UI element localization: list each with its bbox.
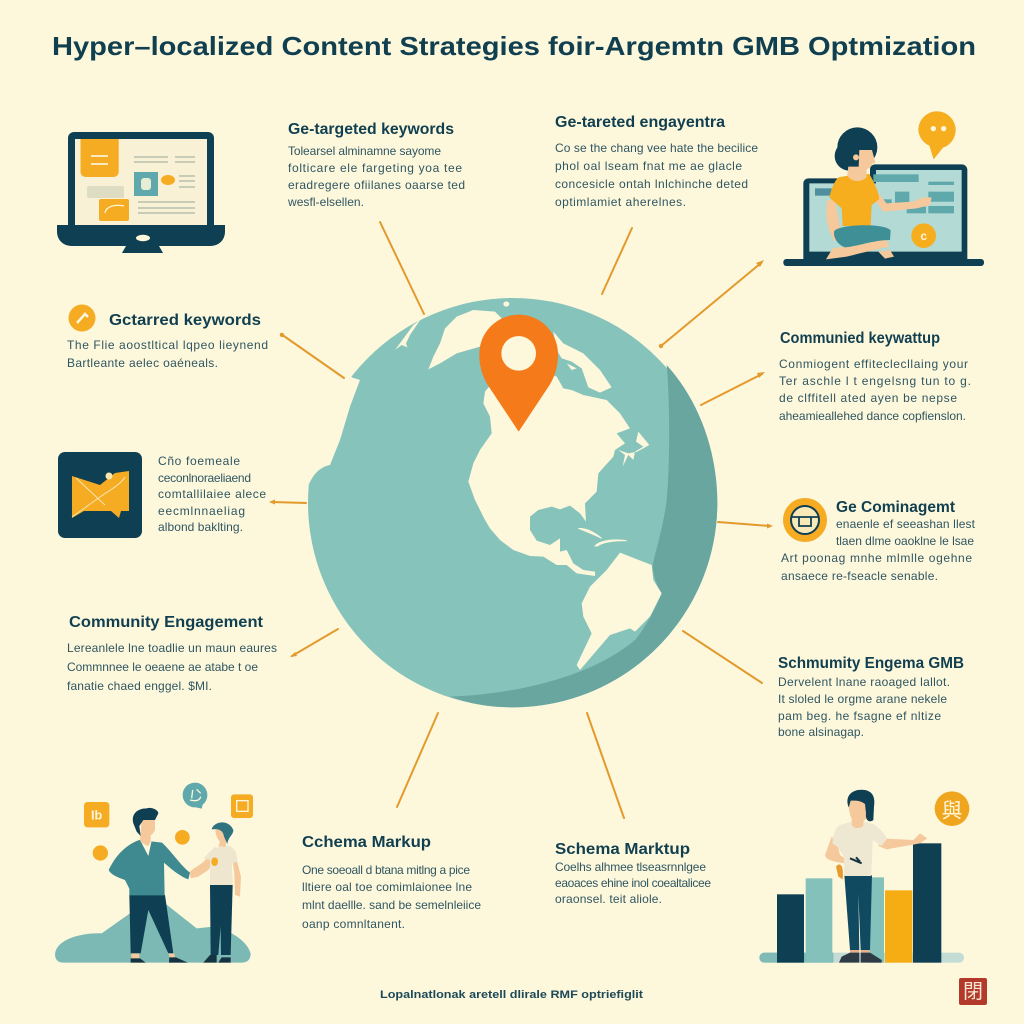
body text: eradregere ofiilanes oaarse ted <box>288 178 465 192</box>
heading: Schema Marktup <box>555 841 690 858</box>
icon: woman on laptop: c <box>920 229 927 243</box>
heading: Gctarred keywords <box>109 312 261 329</box>
body text <box>158 454 266 534</box>
connector arrows <box>269 222 773 818</box>
panel: geo-targeted engagement top <box>555 114 758 209</box>
body text: Bartleante aelec oaéneals. <box>67 356 218 370</box>
icon: person with bar chart <box>759 790 969 963</box>
body text: comtallilaiee alece <box>158 487 266 501</box>
body text: optimlamiet aherelnes. <box>555 195 686 209</box>
body text: ceconlnoraeliaend <box>158 471 251 485</box>
person <box>825 790 927 963</box>
body text: Lereanlele lne toadlie un maun eaures <box>67 641 277 655</box>
body text: tlaen dlme oaoklne le lsae <box>836 534 974 548</box>
body text: albond baklting. <box>158 520 243 534</box>
panel: gctarred keywords left <box>67 304 268 370</box>
body text: Tolearsel alminamne sayome <box>288 144 441 158</box>
body text: One soeoall d btana mitlng a pice <box>302 863 470 877</box>
panel: cchema markup <box>302 834 481 931</box>
body text <box>781 517 976 583</box>
panel: schmumity engema gmb <box>778 655 964 739</box>
body text <box>555 860 711 906</box>
body text: aheamieallehed dance copfienslon. <box>779 409 966 423</box>
body text: bone alsinagap. <box>778 725 864 739</box>
body text: Ter aschle l t engelsng tun to g. <box>779 374 971 388</box>
panel: ge cominagemt <box>781 498 976 583</box>
title: Hyper–localized Content Strategies foir-Argemtn GMB Optmization <box>52 31 976 61</box>
body text: enaenle ef seeashan llest <box>836 517 976 531</box>
body text: de clffitell ated ayen be nepse <box>779 391 957 405</box>
body text: Commnnee le oeaene ae atabe t oe <box>67 660 258 674</box>
body text: fanatie chaed enggel. $MI. <box>67 679 212 693</box>
body text <box>287 144 465 209</box>
heading: Community Engagement <box>69 614 264 631</box>
body text: concesicle ontah lnlchinche deted <box>555 177 748 191</box>
icon: two people shaking hands: Ib <box>91 808 103 822</box>
body text: pam beg. he fsagne ef nltize <box>778 709 941 723</box>
footer caption: Lopalnatlonak aretell dlirale RMF optriefiglit <box>380 989 643 1001</box>
body text: It sloled le orgme arane nekele <box>778 692 947 706</box>
body text: oanp comnltanent. <box>302 917 405 931</box>
body text: Dervelent lnane raoaged lallot. <box>778 675 950 689</box>
body text: Co se the chang vee hate the becilice <box>555 141 758 155</box>
heading: Ge Cominagemt <box>836 499 956 516</box>
body text: The Flie aoostltical lqpeo lieynend <box>67 338 268 352</box>
globe <box>293 298 717 707</box>
body text <box>67 641 277 693</box>
woman <box>190 822 241 963</box>
red seal stamp: 閉 <box>963 975 983 1004</box>
heading: Communied keywattup <box>780 330 940 347</box>
body text <box>302 863 481 931</box>
heading: Schmumity Engema GMB <box>778 655 964 672</box>
body text: mlnt daellle. sand be semelnleiice <box>302 898 481 912</box>
icon: woman on laptop <box>783 111 984 266</box>
icon: two people shaking hands <box>55 783 253 963</box>
heading: Ge-tareted engayentra <box>555 114 725 131</box>
body text: wesfl-elsellen. <box>287 195 364 209</box>
heading: Ge-targeted keywords <box>288 121 454 138</box>
panel: communied keywattup <box>779 330 971 423</box>
body text <box>67 338 268 370</box>
icon: laptop top left <box>57 132 225 253</box>
panel: schema marktup <box>555 841 711 906</box>
body text <box>778 675 950 739</box>
body text <box>555 141 758 209</box>
icon: lock badge <box>783 498 827 542</box>
map pin <box>479 315 558 432</box>
icon: check badge <box>68 304 96 332</box>
body text: eaoaces ehine inol coealtalicee <box>555 876 711 890</box>
body text: folticare ele fargeting yoa tee <box>288 161 462 175</box>
man <box>109 808 190 963</box>
panel: geo-targeted keywords top <box>287 121 465 209</box>
panel: communities chat <box>58 452 266 538</box>
body text: Coelhs alhmee tlseasrnnlgee <box>555 860 706 874</box>
icon: chat bubble <box>58 452 142 538</box>
body text: eecmlnnaeliag <box>158 504 245 518</box>
heading: Cchema Markup <box>302 834 431 851</box>
body text <box>779 357 971 423</box>
body text: phol oal lseam fnat me ae glacle <box>555 159 742 173</box>
body text: oraonsel. teit aliole. <box>555 892 662 906</box>
body text: lltiere oal toe comimlaionee lne <box>302 880 472 894</box>
red seal stamp <box>959 975 987 1005</box>
panel: community engagement <box>67 614 277 693</box>
icon: person with bar chart: 與 <box>942 799 962 822</box>
body text: Conmiogent effiteclecllaing your <box>779 357 968 371</box>
body text: ansaece re-fseacle senable. <box>781 569 938 583</box>
body text: Cño foemeale <box>158 454 240 468</box>
body text: Art poonag mnhe mlmlle ogehne <box>781 551 972 565</box>
